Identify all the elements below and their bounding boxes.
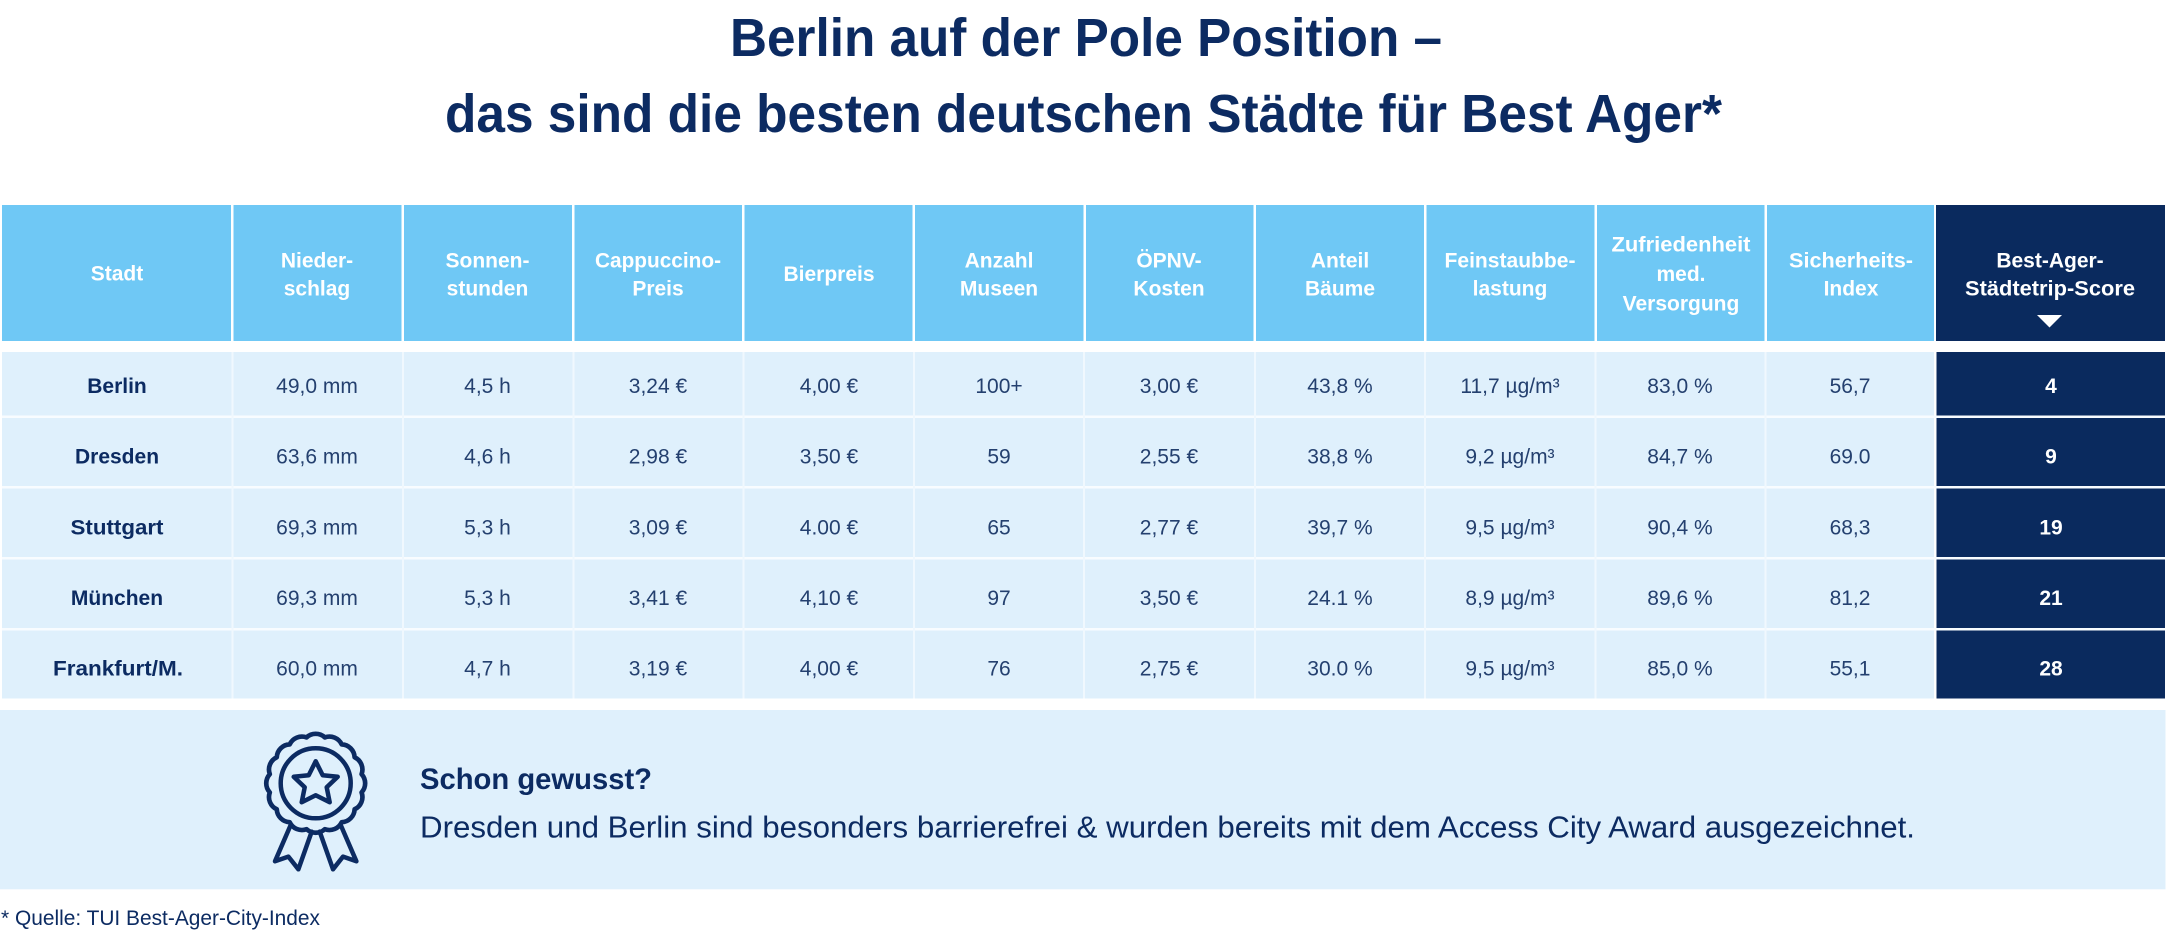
row: Stuttgart: 2,77 € xyxy=(1140,516,1199,539)
row: München: 69,3 mm xyxy=(276,587,358,610)
header row: lastung xyxy=(1473,278,1547,300)
header row: Sicherheits- xyxy=(1789,250,1913,272)
header row: Sonnen- xyxy=(446,250,530,272)
row: Dresden: 2,55 € xyxy=(1140,446,1199,468)
row: Frankfurt/M.: 55,1 xyxy=(1830,658,1870,681)
row: Berlin: 4 xyxy=(2045,375,2057,398)
row: Dresden: 2,98 € xyxy=(629,446,688,468)
panel: callout xyxy=(0,710,2166,889)
row: Stuttgart: 39,7 % xyxy=(1307,516,1373,539)
row: Berlin: Berlin xyxy=(87,375,147,398)
header row: Feinstaubbe- xyxy=(1444,250,1576,272)
header row: Anteil xyxy=(1311,250,1369,272)
row: Berlin: 56,7 xyxy=(1830,375,1870,398)
row: Berlin: 11,7 µg/m³ xyxy=(1460,375,1560,398)
header row: Städtetrip-Score xyxy=(1965,278,2135,300)
row: Frankfurt/M.: 28 xyxy=(2039,658,2063,681)
row: Stuttgart: 90,4 % xyxy=(1647,516,1713,539)
callout heading: Schon gewusst? xyxy=(420,763,652,796)
row: Dresden: 59 xyxy=(987,446,1011,468)
header row: Museen xyxy=(960,278,1038,300)
row: Dresden xyxy=(75,446,2057,468)
title xyxy=(445,8,1722,144)
header row: schlag xyxy=(284,278,350,300)
row: Stuttgart xyxy=(70,516,2063,539)
header row: Nieder- xyxy=(281,250,353,272)
row: München: 89,6 % xyxy=(1647,587,1713,610)
header row: med. xyxy=(1656,263,1706,286)
icon: sort arrow xyxy=(2037,315,2062,328)
row: München: 81,2 xyxy=(1830,587,1870,610)
row: München: 8,9 µg/m³ xyxy=(1465,587,1555,610)
row: Stuttgart: Stuttgart xyxy=(70,516,164,539)
row: Stuttgart: 19 xyxy=(2039,516,2063,539)
row: Frankfurt/M.: 76 xyxy=(987,658,1011,681)
row: München: 24.1 % xyxy=(1307,587,1373,610)
row: München: 97 xyxy=(987,587,1011,610)
row: München xyxy=(71,587,2063,610)
row: Frankfurt/M.: 30.0 % xyxy=(1307,658,1373,681)
row: Dresden: 38,8 % xyxy=(1307,446,1373,468)
row: Frankfurt/M.: 85,0 % xyxy=(1647,658,1713,681)
row: Berlin: 49,0 mm xyxy=(276,375,358,398)
row: Stuttgart: 5,3 h xyxy=(464,516,511,539)
icon: award rosette xyxy=(266,734,365,869)
source note: * Quelle: TUI Best-Ager-City-Index xyxy=(1,907,320,930)
header row: Versorgung xyxy=(1623,292,1739,316)
row: Berlin: 43,8 % xyxy=(1307,375,1373,398)
row: Berlin: 3,00 € xyxy=(1140,375,1199,398)
row: München: 4,10 € xyxy=(800,587,859,610)
row: Frankfurt/M.: 3,19 € xyxy=(629,658,688,681)
row: Stuttgart: 3,09 € xyxy=(629,516,688,539)
row: Dresden: 4,6 h xyxy=(464,446,511,468)
row: Berlin xyxy=(87,375,2057,398)
row: München: München xyxy=(71,587,163,610)
row: Berlin: 3,24 € xyxy=(629,375,688,398)
row: München: 5,3 h xyxy=(464,587,511,610)
row: Frankfurt/M.: 60,0 mm xyxy=(276,658,358,681)
row: Dresden: 63,6 mm xyxy=(276,446,358,468)
row: Frankfurt/M.: 2,75 € xyxy=(1140,658,1199,681)
row: München: 3,41 € xyxy=(629,587,688,610)
header row: Stadt xyxy=(91,262,143,286)
row: Berlin: 83,0 % xyxy=(1647,375,1713,398)
row: Berlin: 4,5 h xyxy=(464,375,511,398)
row: Stuttgart: 68,3 xyxy=(1830,516,1870,539)
row: Frankfurt/M.: 4,00 € xyxy=(800,658,859,681)
header row: Bierpreis xyxy=(783,263,875,286)
row: Stuttgart: 69,3 mm xyxy=(276,516,358,539)
title: das sind die besten deutschen Städte für Best Ager* xyxy=(445,84,1722,144)
row: Frankfurt/M.: Frankfurt/M. xyxy=(53,658,183,681)
row: Dresden: 69.0 xyxy=(1830,446,1870,468)
row: Frankfurt/M. xyxy=(53,658,2063,681)
row: Dresden: Dresden xyxy=(75,446,159,468)
row: Dresden: 84,7 % xyxy=(1647,446,1713,468)
header row: Bäume xyxy=(1305,278,1375,300)
header row: Kosten xyxy=(1133,278,1205,300)
row: Dresden: 3,50 € xyxy=(800,446,859,468)
header row: stunden xyxy=(447,278,528,300)
row: Frankfurt/M.: 9,5 µg/m³ xyxy=(1465,658,1555,681)
callout text: Dresden und Berlin sind besonders barrierefrei & wurden bereits mit dem Access City Award ausgezeichnet. xyxy=(420,810,1915,844)
row: Berlin: 100+ xyxy=(975,375,1023,398)
row: Berlin: 4,00 € xyxy=(800,375,859,398)
row: Dresden: 9,2 µg/m³ xyxy=(1465,446,1555,468)
header row: Best-Ager- xyxy=(1996,250,2104,272)
header row xyxy=(2,205,2165,341)
header row: ÖPNV- xyxy=(1136,250,1202,272)
row: Stuttgart: 65 xyxy=(987,516,1011,539)
table xyxy=(2,205,2165,698)
header row: Anzahl xyxy=(965,250,1033,272)
row: Frankfurt/M.: 4,7 h xyxy=(464,658,511,681)
row: Stuttgart: 9,5 µg/m³ xyxy=(1465,516,1555,539)
row: Stuttgart: 4.00 € xyxy=(800,516,859,539)
row: München: 21 xyxy=(2039,587,2063,610)
table body background xyxy=(2,352,2165,698)
row: München: 3,50 € xyxy=(1140,587,1199,610)
row: Dresden: 9 xyxy=(2045,446,2057,468)
header row: Index xyxy=(1824,278,1879,300)
title: Berlin auf der Pole Position – xyxy=(730,8,1442,68)
header row: Cappuccino- xyxy=(595,250,721,272)
header row: Preis xyxy=(632,278,684,300)
header row: Zufriedenheit xyxy=(1612,234,1750,256)
